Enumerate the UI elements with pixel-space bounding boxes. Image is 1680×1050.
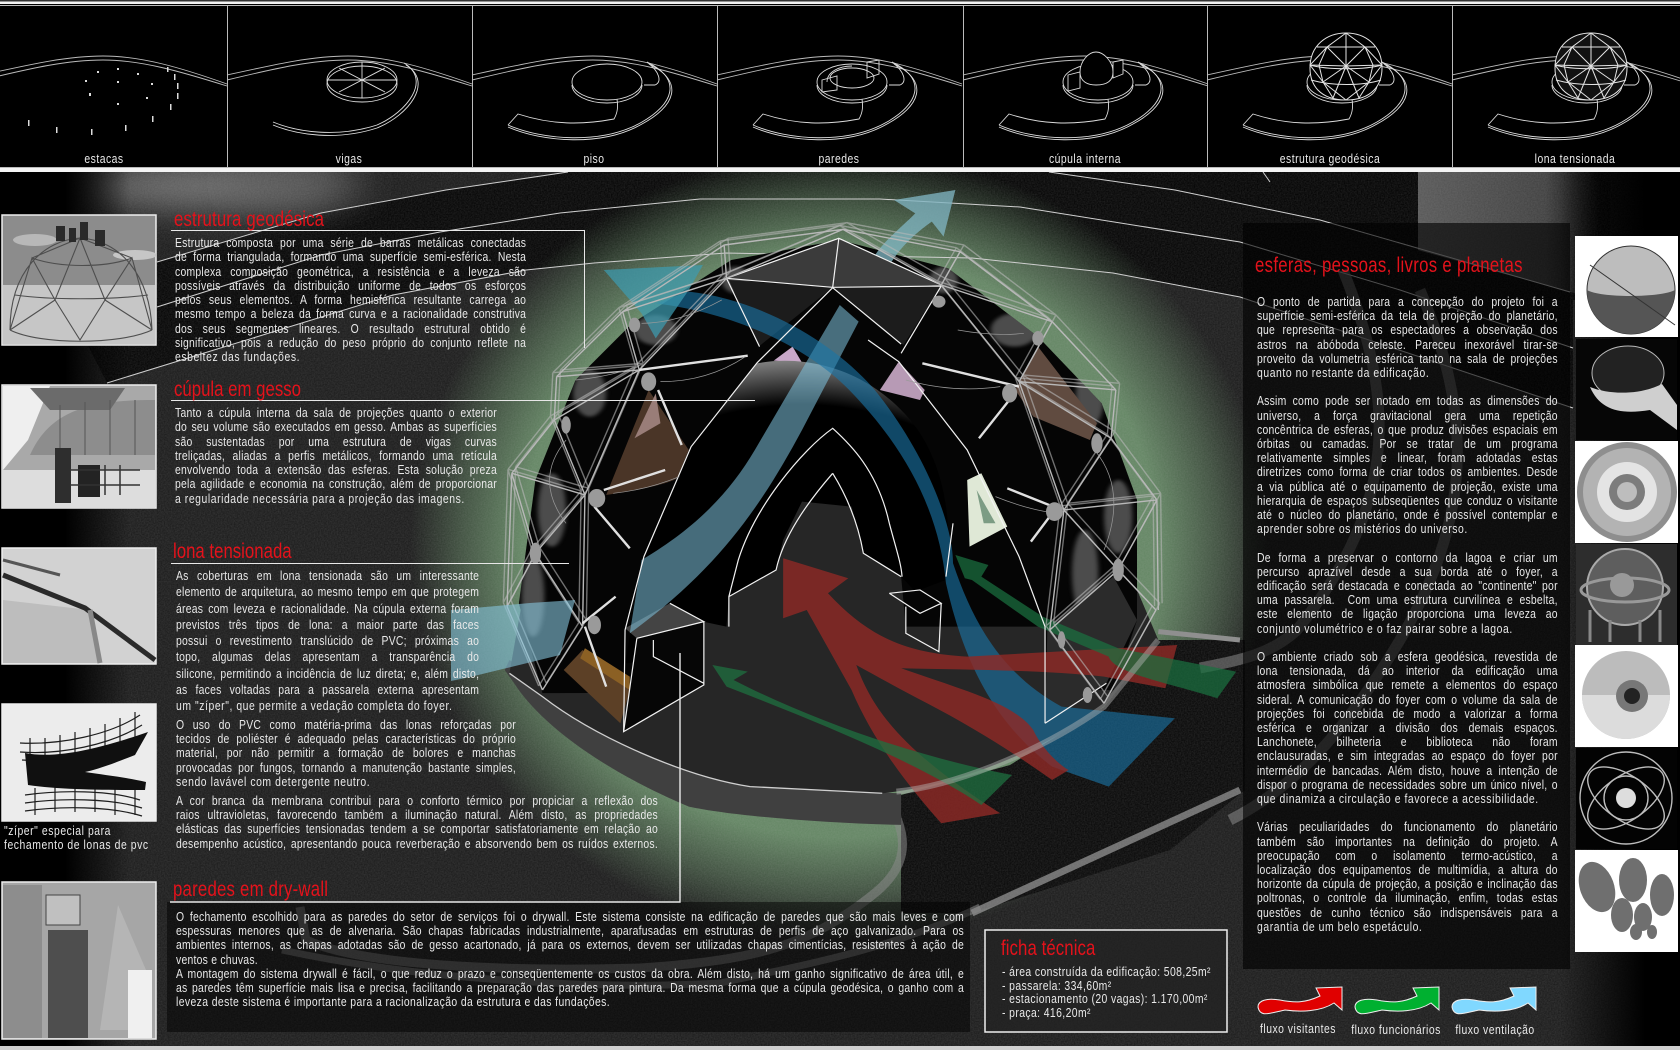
walkways — [282, 270, 1457, 985]
text: paredes em dry-wall: ventos e chuvas. — [176, 952, 258, 967]
text: lona tensionada intro: um "zíper", que permite a vedação completa do foyer. — [176, 698, 452, 713]
text: esferas body: lona tensionada, dá ao interior da edificação uma — [1257, 663, 1558, 678]
text: esferas body: esférica e organizar a divisão dos demais espaços. — [1257, 720, 1558, 735]
text: estrutura geodésica: Estrutura composta por uma série de barras metálicas conectadas — [175, 235, 526, 250]
text: esferas body: Assim como pode ser notado em todas as dimensões do — [1257, 393, 1558, 408]
text: esferas body: conjunto volumétrico e o faz pairar sobre a lagoa. — [1257, 621, 1513, 636]
text: esferas body: preocupação com o isolamento termo-acústico, a — [1257, 848, 1558, 863]
text: esferas body: projeções foi concebida de modo a valorizar a forma — [1257, 706, 1558, 721]
icon: staff flow arrow — [1355, 987, 1439, 1014]
text: lona tensionada intro: silicone, permitindo a incidência de luz direta; e, além disto, — [176, 666, 479, 680]
text: estrutura geodésica: dos seus segmentos lineares. O resultado estrutural obtido é — [175, 321, 526, 336]
text: lona tensionada membrana: desempenho acústico, apresentando pouca reverberação e absorvendo bem os ruídos externos. — [176, 836, 658, 851]
text: lona tensionada intro: áreas com leveza e racionalidade. Na cúpula externa foram — [176, 600, 479, 616]
text: cúpula em gesso: pela agilidade e economia na construção, além de proporcionar — [175, 476, 497, 491]
text: lona tensionada pvc: provocadas por fungos, tornando a manutenção bastante simples, — [176, 760, 516, 775]
strip captions: paredes — [819, 151, 859, 166]
text: cúpula em gesso: a regularidade necessária para a projeção das imagens. — [175, 491, 465, 506]
photo: zipper for pvc membrane — [2, 704, 156, 821]
text: lona tensionada pvc: material, por não permitir a formação de bolores e manchas — [176, 745, 516, 760]
heading: estrutura geodésica: estrutura geodésica — [174, 208, 324, 231]
text: lona tensionada intro: elemento de arquitetura, ao mesmo tempo em que protegem — [176, 584, 479, 599]
strip captions: cúpula interna — [1049, 151, 1121, 166]
text: esferas body: sideral. A comunicação do foyer com o volume da sala de — [1257, 692, 1558, 707]
photo: cell — [1575, 645, 1678, 747]
text: esferas body: quanto no restante da edificação. — [1257, 365, 1429, 380]
photo: drywall installation — [2, 882, 156, 1039]
text: estrutura geodésica — [175, 235, 526, 364]
text: cúpula em gesso: envolvendo toda a extensão das esferas. Esta solução preza — [175, 462, 497, 477]
coloured faces — [564, 347, 1097, 723]
text: esferas body: diretrizes como forma de criar todos os ambientes. Desde — [1257, 464, 1558, 479]
text: lona tensionada pvc: O uso do PVC como matéria-prima das lonas reforçadas por — [176, 717, 516, 732]
panel: ficha técnica box — [985, 930, 1227, 1032]
text: estrutura geodésica: possíveis através da distribuição uniforme de todos os esforços — [175, 278, 526, 293]
text: esferas body: universo, a força gravitacional gera uma repetição — [1257, 408, 1558, 423]
panel: cúpula interna — [963, 52, 1208, 140]
text: lona tensionada intro: As coberturas em lona tensionada são um interessante — [176, 568, 479, 583]
text: esferas body: localização dos equipamentos de multimídia, a altura do — [1257, 862, 1558, 877]
caption: zipper: "zíper" especial para — [4, 823, 111, 838]
text: esferas body: superfície semi-esférica da tela de projeção do planetário, — [1257, 308, 1558, 323]
text: esferas body: aprender sobre os mistérios do universo. — [1257, 521, 1468, 536]
photo: solar system chart — [1575, 441, 1678, 543]
text: esferas body: astros na abóboda celeste. Pareceu inexorável tirar-se — [1257, 337, 1558, 352]
right block panel — [1045, 577, 1137, 723]
panel: estacas — [0, 56, 227, 135]
text: lona tensionada pvc — [176, 717, 516, 789]
text: esferas body: percurso aprazível desde a sua borda até o foyer, a — [1257, 564, 1558, 579]
text: esferas body: proveito da volumetria esférica tanto na sala de projeções — [1257, 351, 1558, 366]
text: estrutura geodésica: significativo, pois a redução do peso próprio do conjunto reflete na — [175, 335, 526, 350]
text: esferas body: este elemento de ligação proporciona uma leveza ao — [1257, 606, 1558, 621]
panel: lona tensionada — [1452, 33, 1680, 140]
text: esferas body: que representa para os espectadores a observação dos — [1257, 322, 1558, 337]
text: esferas body: De forma a preservar o contorno da lagoa e criar um — [1257, 550, 1558, 565]
geodesic bars — [503, 223, 1162, 703]
text: cúpula em gesso: Tanto a cúpula interna da sala de projeções quanto o exterior — [175, 405, 497, 420]
text: paredes em dry-wall: as paredes têm superfície mais lisa e precisa, facilitando a preparação das paredes para pintura. Da mesma forma que a cúpula geodésica, o ganho com a — [176, 980, 964, 995]
text: paredes em dry-wall: A montagem do sistema drywall é fácil, o que reduz o prazo e conseqüentemente os custos da obra. Além disto, há um ganho significativo de área útil, e — [176, 966, 964, 981]
text: cúpula em gesso: do seu volume são executados em gesso. Ambas as superfícies — [175, 419, 497, 434]
text: lona tensionada membrana: elásticas das superfícies tensionadas tendem a se comportar satisfatoriamente em relação ao — [176, 821, 658, 836]
dome — [500, 190, 1240, 825]
text: esferas body: concêntrica de esferas, o que produz divisões espaciais em — [1257, 422, 1558, 437]
text: esferas body: hierarquia de espaços subseqüentes que conduz o visitante — [1257, 493, 1558, 508]
text: esferas body: O ponto de partida para a concepção do projeto foi a — [1257, 294, 1558, 309]
text: ficha técnica: - estacionamento (20 vagas): 1.170,00m² — [1002, 991, 1208, 1006]
photo: armillary sphere — [1576, 544, 1677, 645]
text: cúpula em gesso: são sustentadas por uma estrutura de vigas curvas — [175, 434, 497, 449]
top cap — [727, 238, 941, 347]
text: lona tensionada membrana: raios ultravioletas, favorecendo também a iluminação natural. Além disto, as propriedades — [176, 807, 658, 822]
icon: visitor flow arrow — [1258, 987, 1342, 1014]
floor ring — [505, 660, 901, 825]
text: paredes em dry-wall: leveza deste sistema é importante para a racionalização da estrutura e das fundações. — [176, 994, 610, 1009]
left service block — [624, 603, 704, 732]
text: lona tensionada membrana — [176, 792, 658, 851]
text: esferas body: edificação será destacada e conectada ao "continente" por — [1257, 578, 1558, 593]
inner floor — [624, 502, 1045, 732]
text: estrutura geodésica: de forma triangulada, formando uma superfície semi-esférica. Nesta — [175, 249, 526, 264]
text: esferas body: Lanchonete, bilheteria e biblioteca não foram — [1257, 734, 1558, 749]
bar joints — [530, 296, 1124, 703]
text: esferas body: relativamente simples e linear, foram adotadas estas — [1257, 450, 1558, 465]
photo: celestial sphere — [1575, 236, 1678, 337]
text: estrutura geodésica: esbeltez das fundações. — [175, 349, 300, 364]
heading: ficha técnica: ficha técnica — [1001, 937, 1095, 960]
text: paredes em dry-wall: ambientes internos, as chapas adotadas são de gesso acartonado, já para os externos, devem ser utilizadas chapas cimentícias, resistentes à ação de — [176, 937, 964, 952]
photo: plaster dome interior — [2, 385, 156, 508]
panel: esferas text backdrop — [1243, 223, 1570, 969]
white interior outlines — [624, 238, 1106, 732]
text: esferas body: dispor o programa de necessidades sobre um único nível, o — [1257, 777, 1558, 792]
membrane — [518, 242, 1137, 694]
text: lona tensionada pvc: sendo lavável com detergente neutro. — [176, 774, 370, 789]
photo strip: construction sequence — [0, 0, 1680, 172]
strip captions: estrutura geodésica — [1280, 151, 1380, 166]
text: lona tensionada membrana: A cor branca da membrana contribui para o conforto térmico por propiciar a reflexão dos — [176, 792, 658, 808]
arrow: ventilation through left wall — [451, 600, 575, 681]
text: esferas body: questões de cunho técnico são indispensáveis para a — [1257, 905, 1558, 920]
text: lona tensionada intro: topo, algumas delas apresentam a transparência do — [176, 649, 479, 664]
panel: paredes — [717, 56, 962, 140]
text: estrutura geodésica: mesmo tempo a beleza da forma curva e a racionalidade construtiva — [175, 306, 526, 321]
panel: dry-wall text backdrop — [167, 902, 970, 1032]
legend label: fluxo funcionários: fluxo funcionários — [1351, 1022, 1441, 1037]
panel: piso — [472, 56, 717, 140]
strip captions: estacas — [84, 151, 124, 166]
text: esferas body: poltronas, o controle da iluminação, enfim, todas estas — [1257, 890, 1558, 905]
text: esferas body: que dinamiza a circulação e favorece a acessibilidade. — [1257, 791, 1539, 806]
text: lona tensionada pvc: tecidos de poliéster é adequado pelas características do próprio — [176, 731, 516, 746]
text: ficha técnica: - área construída da edificação: 508,25m² — [1002, 964, 1211, 979]
text: paredes em dry-wall — [176, 909, 964, 1009]
photo: nesting dolls — [1572, 850, 1678, 952]
text: esferas body: horizonte da cúpula de projeção, a posição e inclinação das — [1257, 876, 1558, 891]
text: ficha técnica: - passarela: 334,60m² — [1002, 978, 1112, 993]
text: esferas body: uma passarela. Com uma estrutura curvilínea e esbelta, — [1257, 592, 1558, 607]
text: estrutura geodésica: complexa composição geométrica, a resistência e a leveza são — [175, 264, 526, 279]
text: esferas body — [1257, 294, 1558, 934]
heading: esferas, pessoas, livros e planetas: esferas, pessoas, livros e planetas — [1255, 254, 1523, 277]
text: esferas body: intermédio de bancadas. Além disto, houve a intenção de — [1257, 763, 1558, 778]
text: lona tensionada intro — [176, 568, 479, 713]
strip captions: lona tensionada — [1535, 151, 1615, 166]
text: esferas body: O ambiente criado sob a esfera geodésica, revestida de — [1257, 649, 1558, 664]
photo: geodesic dome with people — [2, 215, 157, 345]
site contour lines — [107, 172, 1573, 408]
heading: lona tensionada: lona tensionada — [173, 540, 292, 563]
floor — [509, 590, 1158, 793]
photo: tensioned membrane structure — [2, 548, 156, 664]
text: esferas body: a via pública até o equipamento de projeção, existe uma — [1257, 479, 1558, 494]
icon: ventilation flow arrow — [1452, 987, 1536, 1014]
text: esferas body: até o núcleo do planetário, onde é possível contemplar e — [1257, 507, 1558, 522]
strip captions: piso — [584, 151, 604, 166]
platform rim — [509, 632, 1240, 793]
inner sphere and arches — [625, 361, 949, 663]
text: ficha técnica: - praça: 416,20m² — [1002, 1005, 1091, 1020]
caption: zipper: fechamento de lonas de pvc — [4, 836, 149, 852]
text: esferas body: garantia de um belo espetáculo. — [1257, 919, 1422, 934]
photo: atom — [1576, 748, 1677, 849]
text: cúpula em gesso — [175, 405, 497, 506]
text: esferas body: órbitas ou camadas. Por se tratar de um programa — [1257, 436, 1558, 451]
text: esferas body: enclausuradas, e sim integradas ao espaço do foyer por — [1257, 748, 1558, 763]
strip captions: vigas — [336, 151, 362, 166]
text: esferas body: também são importantes na definição do projeto. A — [1257, 834, 1558, 849]
text: esferas body: Várias peculiaridades do funcionamento do planetário — [1257, 819, 1558, 834]
panel: vigas — [227, 56, 472, 135]
text: paredes em dry-wall: espessuras menores que as de alvenaria. São chapas fabricadas industrialmente, aparafusadas em estruturas de perfis de aço galvanizado. Para os — [176, 923, 964, 938]
bottom border — [0, 1046, 1680, 1050]
text: lona tensionada intro: previstos três tipos de lona: a maior parte das faces — [176, 617, 479, 632]
text: paredes em dry-wall: O fechamento escolhido para as paredes do setor de serviços foi o drywall. Este sistema consiste na edificação de paredes que são mais leves e com — [176, 909, 964, 924]
text: estrutura geodésica: pelos seus elementos. A forma hemisférica resultante carrega ao — [175, 292, 526, 307]
text: ficha técnica — [1002, 964, 1211, 1020]
legend label: fluxo ventilação: fluxo ventilação — [1455, 1022, 1535, 1037]
legend label: fluxo visitantes: fluxo visitantes — [1260, 1021, 1336, 1036]
strip captions — [84, 151, 1615, 166]
panel: estrutura geodésica — [1207, 33, 1452, 140]
text: lona tensionada intro: as faces voltadas para a passarela externa apresentam — [176, 682, 479, 697]
text: cúpula em gesso: treliçadas, aliadas a perfis metálicos, formando uma retícula — [175, 448, 497, 463]
caption: zipper — [4, 823, 149, 852]
text: lona tensionada intro: possui o revestimento translúcido de PVC; próximas ao — [176, 633, 479, 648]
flow arrows — [604, 190, 1236, 823]
text: esferas body: atmosfera simbólica que remete a elementos do espaço — [1257, 677, 1558, 692]
heading: paredes em dry-wall: paredes em dry-wall — [173, 878, 328, 901]
photo: soap bubble on hand — [1576, 339, 1677, 440]
heading: cúpula em gesso: cúpula em gesso — [174, 378, 301, 401]
